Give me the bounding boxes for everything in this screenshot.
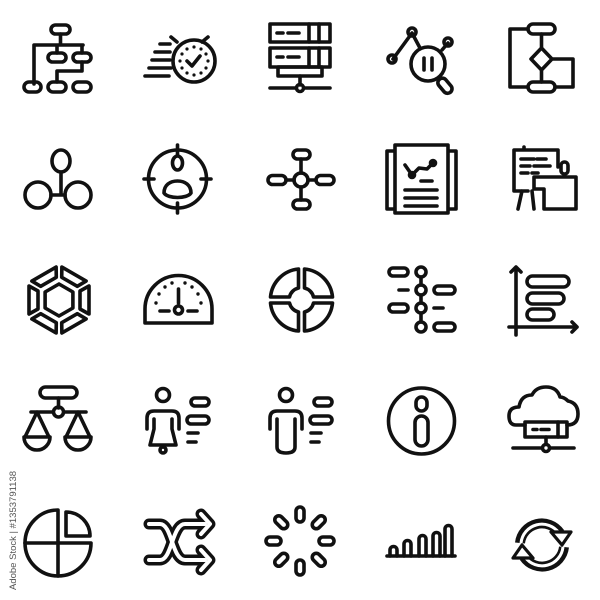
- icon: presentation board: [514, 147, 576, 209]
- icon: server: [270, 24, 330, 92]
- icon: cloud server: [509, 387, 578, 452]
- icon: info: [388, 388, 454, 454]
- icon: scale hierarchy: [24, 387, 91, 450]
- icon: signal bars: [387, 526, 455, 556]
- icon: lifebuoy: [270, 269, 332, 331]
- icon: stopwatch: [145, 37, 215, 82]
- icon: flowchart: [510, 24, 573, 92]
- icon: org chart: [24, 25, 91, 92]
- icon: pie chart: [25, 510, 91, 576]
- icon: target person: [144, 145, 211, 213]
- icon: report document: [387, 145, 456, 213]
- icon: refresh: [513, 523, 571, 567]
- icon: horizontal bar chart: [509, 267, 577, 335]
- icon: timeline: [389, 267, 455, 332]
- icon: three circles network: [25, 150, 91, 208]
- icon: hub: [268, 150, 334, 209]
- icon: loading spinner: [266, 507, 334, 575]
- credit text: Adobe Stock | #1353791138: [8, 471, 19, 590]
- icon: woman with list: [147, 388, 209, 453]
- icon: man with list: [270, 388, 332, 453]
- icon: data analysis magnifier: [388, 28, 454, 95]
- icon: hexagon segments: [29, 267, 89, 333]
- icon: shuffle: [149, 514, 210, 570]
- icon: gauge: [145, 276, 212, 323]
